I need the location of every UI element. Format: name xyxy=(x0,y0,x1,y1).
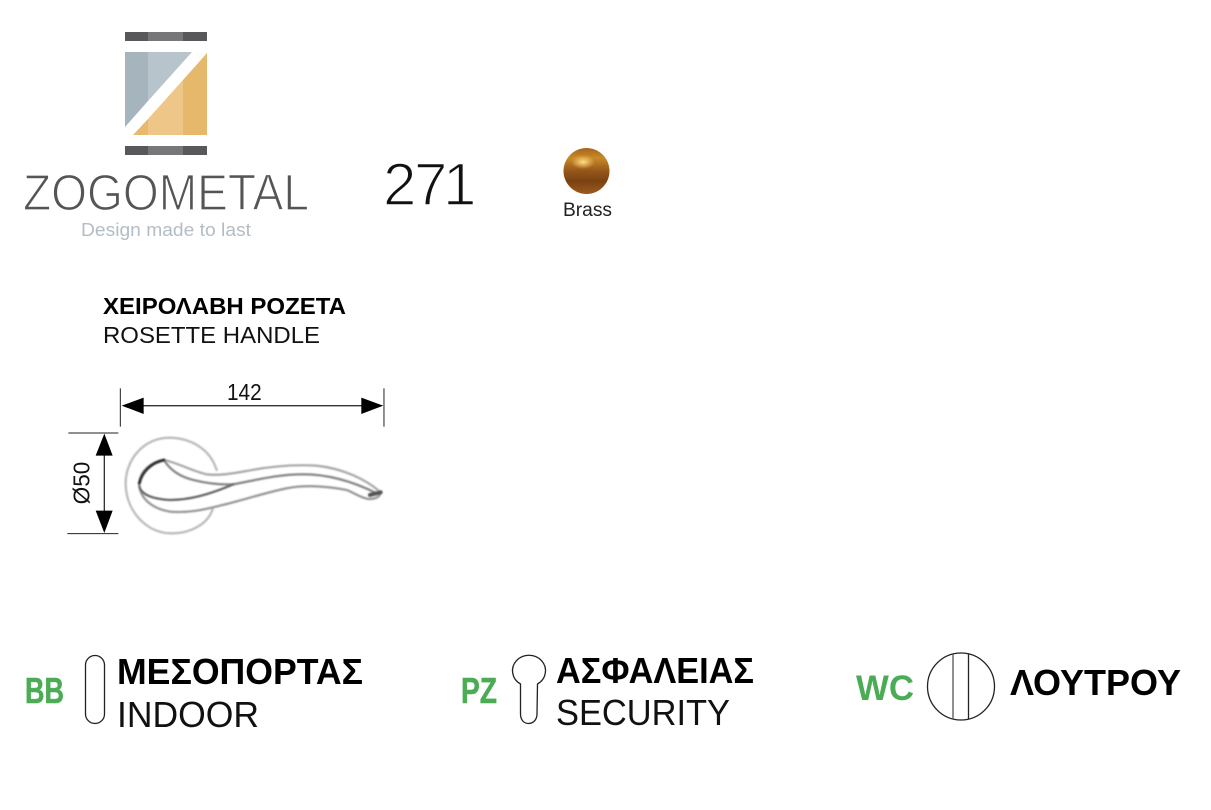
logo wordmark: ZOGOMETAL xyxy=(23,164,309,221)
label in Greek: ΛΟΥΤΡΟΥ xyxy=(1010,662,1181,703)
technical drawing: handle with dimensions xyxy=(67,379,384,534)
logo tagline: Design made to last xyxy=(81,219,251,240)
product title xyxy=(103,293,346,348)
BB code: BB xyxy=(25,670,64,711)
dimension: diameter 50: Ø50 xyxy=(68,462,94,504)
label in English: SECURITY xyxy=(556,692,730,733)
lock type: PZ security xyxy=(461,650,754,733)
icon: security keyhole xyxy=(513,655,546,724)
handle drawing xyxy=(126,438,381,533)
title in Greek: ΧΕΙΡΟΛΑΒΗ ΡΟΖΕΤΑ xyxy=(103,293,346,319)
model number: 271 xyxy=(383,151,476,218)
finish label: Brass xyxy=(563,200,612,221)
label in English: INDOOR xyxy=(117,694,259,735)
logo mark: bars and triangles xyxy=(125,32,207,155)
icon: brass sphere xyxy=(564,148,610,194)
title in English: ROSETTE HANDLE xyxy=(103,322,320,348)
logo: Zogometal xyxy=(23,32,309,240)
PZ code: PZ xyxy=(461,670,497,711)
icon: indoor keyhole xyxy=(86,656,104,724)
dimension: diameter 50 xyxy=(67,433,118,534)
dimension: width 142: 142 xyxy=(227,379,262,405)
finish swatch: brass xyxy=(563,148,612,221)
label in Greek: ΑΣΦΑΛΕΙΑΣ xyxy=(556,650,754,691)
WC code: WC xyxy=(856,669,914,708)
icon: bathroom turn lock xyxy=(928,653,994,720)
dimension: width 142 xyxy=(120,379,384,427)
lock type: WC bathroom xyxy=(856,653,1181,720)
lock type: BB indoor xyxy=(25,651,363,735)
label in Greek: ΜΕΣΟΠΟΡΤΑΣ xyxy=(117,651,363,692)
